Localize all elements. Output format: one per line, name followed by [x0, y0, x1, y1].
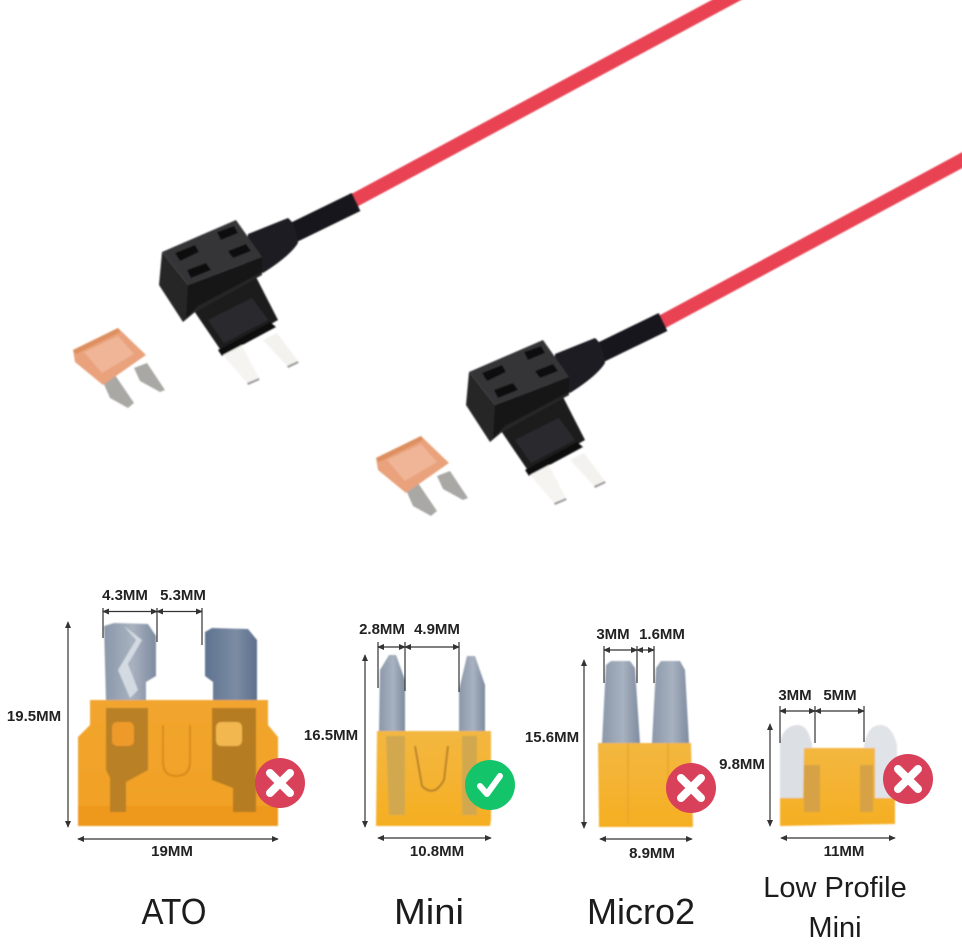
icon: red cross: [883, 754, 933, 804]
ATO dimensions: 4.3MM: [102, 587, 148, 604]
Micro2 fuse panel: [525, 626, 716, 932]
Micro2 dimensions: 1.6MM: [639, 626, 685, 643]
label: Low Profile Mini: Low Profile: [763, 872, 907, 904]
Low Profile Mini dimensions: [719, 687, 895, 860]
Mini dimensions: 2.8MM: [359, 621, 405, 638]
Mini fuse panel: [304, 621, 515, 932]
mini fuse: lower: [376, 436, 468, 516]
Low Profile Mini dimensions: 5MM: [823, 687, 857, 704]
icon: green check: [465, 760, 515, 810]
Low Profile Mini fuse panel: [719, 687, 933, 944]
ATO dimensions: 19MM: [151, 843, 193, 860]
Low Profile Mini fuse image: [780, 725, 897, 826]
label: ATO: ATO: [142, 891, 206, 932]
Micro2 fuse image: [598, 661, 693, 827]
ATO fuse panel: [7, 587, 305, 932]
Mini dimensions: 16.5MM: [304, 727, 358, 744]
Micro2 dimensions: [525, 626, 692, 862]
Mini dimensions: [304, 621, 491, 860]
label: Micro2: Micro2: [587, 891, 695, 932]
ATO dimensions: [7, 587, 278, 860]
Micro2 dimensions: 3MM: [596, 626, 630, 643]
ATO dimensions: 19.5MM: [7, 708, 61, 725]
ATO dimensions: 5.3MM: [160, 587, 206, 604]
Micro2 dimensions: 8.9MM: [629, 845, 675, 862]
label: Low Profile Mini: Mini: [808, 912, 862, 944]
Mini dimensions: 4.9MM: [414, 621, 460, 638]
icon: red cross: [666, 763, 716, 813]
Mini dimensions: 10.8MM: [410, 843, 464, 860]
fuse tap connector: upper: [159, 202, 356, 385]
label: Mini: Mini: [394, 891, 464, 932]
Low Profile Mini dimensions: 3MM: [778, 687, 812, 704]
Low Profile Mini dimensions: 9.8MM: [719, 756, 765, 773]
ATO fuse image: [78, 623, 278, 826]
red wire: lower: [660, 157, 962, 323]
mini fuse: upper: [73, 328, 165, 408]
label: Low Profile Mini: [763, 872, 907, 944]
icon: red cross: [255, 758, 305, 808]
Low Profile Mini dimensions: 11MM: [824, 843, 864, 860]
fuse tap connector: lower: [466, 322, 663, 505]
Mini fuse image: [376, 655, 491, 826]
red wire: upper: [353, 0, 745, 201]
Micro2 dimensions: 15.6MM: [525, 729, 579, 746]
